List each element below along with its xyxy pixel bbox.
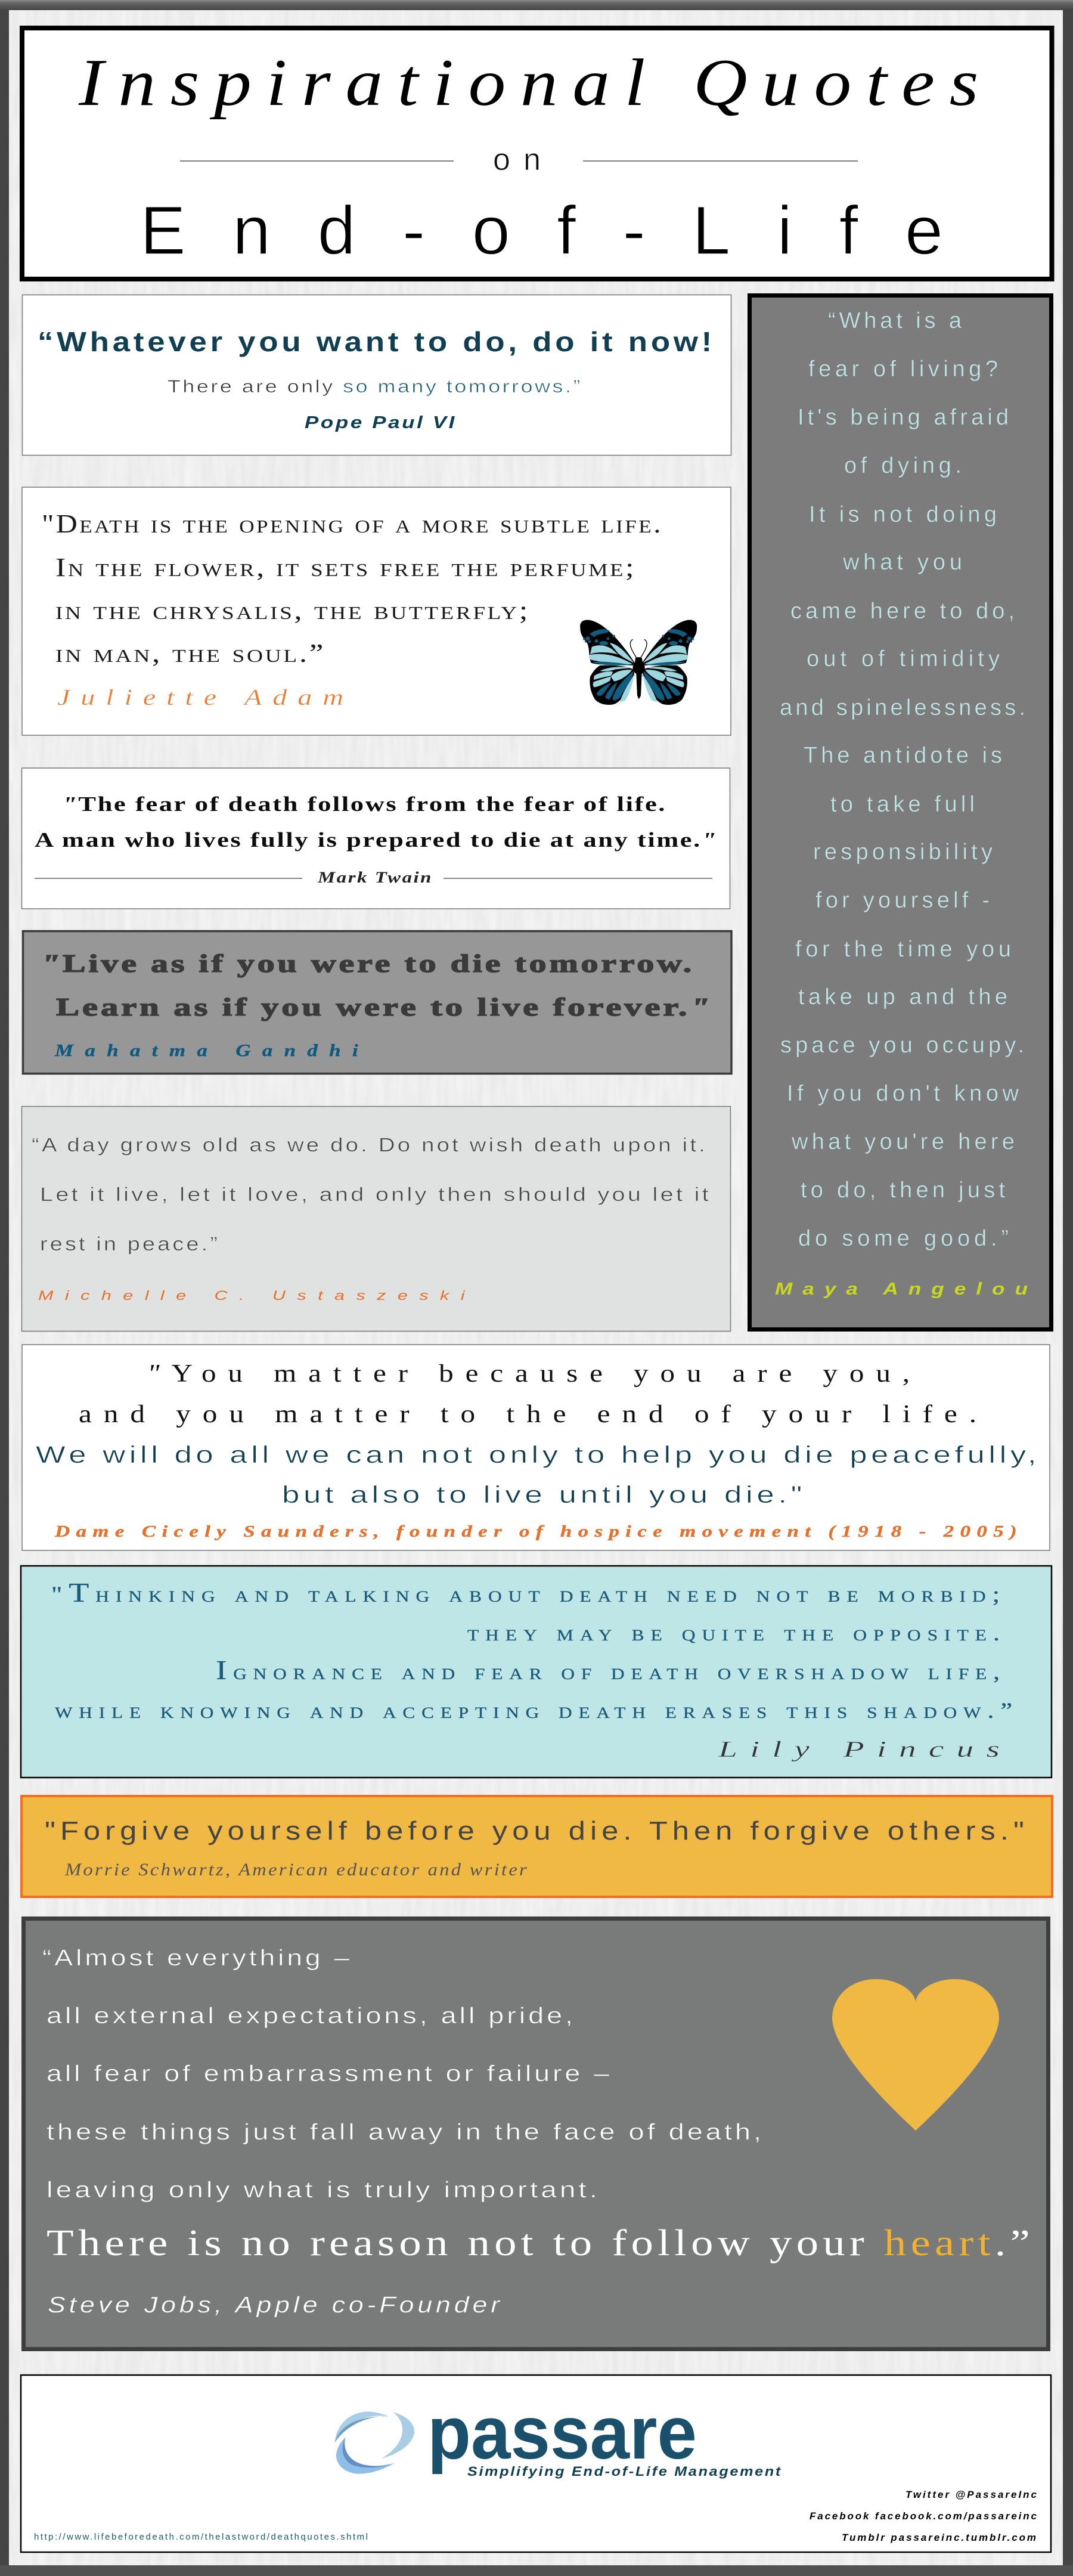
quote text: in man, the soul.” — [55, 639, 325, 668]
quote text — [42, 509, 663, 668]
quote text: Learn as if you were to live forever. " — [56, 994, 712, 1021]
divider line right — [583, 160, 858, 162]
quote headline: “Whatever you want to do, do it now! — [38, 326, 715, 357]
quote text: "Thinking and talking about death need not be morbid; — [51, 1577, 1006, 1608]
icon: butterfly — [580, 620, 697, 705]
quote text: space you occupy. — [780, 1033, 1024, 1058]
quote text: fear of living? — [808, 357, 998, 382]
subtitle: on: on — [493, 143, 541, 177]
quote text — [51, 1577, 1019, 1723]
quote text teal: but also to live until you die." — [282, 1482, 806, 1508]
quote text — [780, 308, 1025, 1251]
quote text — [42, 1946, 764, 2203]
icon: heart — [832, 1979, 999, 2131]
quote text: leaving only what is truly important. — [46, 2178, 600, 2203]
quote text: came here to do, — [790, 599, 1015, 624]
quote text: what you're here — [791, 1129, 1015, 1154]
source url: http://www.lifebeforedeath.com/thelastword/deathquotes.shtml — [34, 2532, 368, 2542]
quote text black: and you matter to the end of your life. — [79, 1401, 988, 1428]
quote text black: "You matter because you are you, — [147, 1360, 922, 1388]
quote text: “Almost everything – — [42, 1946, 352, 1971]
panel: Gandhi quote — [23, 931, 731, 1073]
quote text: "The fear of death follows from the fear of life. — [62, 792, 666, 816]
quote text: in the chrysalis, the butterfly; — [55, 596, 530, 625]
quote text teal: We will do all we can not only to help you die peacefully, — [36, 1442, 1040, 1468]
quote text — [32, 1134, 711, 1255]
icon: passare swoosh — [335, 2411, 414, 2474]
quote text: they may be quite the opposite. — [467, 1621, 1006, 1646]
social links: Tumblr passareinc.tumblr.com — [842, 2532, 1036, 2543]
attribution: Steve Jobs, Apple co-Founder — [48, 2293, 503, 2318]
quote text: If you don't know — [787, 1081, 1019, 1106]
quote text: and spinelessness. — [780, 695, 1025, 720]
quote text: The antidote is — [804, 743, 1002, 768]
quote text: for the time you — [795, 937, 1011, 962]
panel: Lily Pincus quote — [21, 1566, 1052, 1778]
wordmark: passare — [427, 2392, 697, 2475]
panel: Michelle C. Ustaszeski quote — [21, 1107, 731, 1331]
quote text: while knowing and accepting death erases this shadow.” — [55, 1699, 1019, 1723]
quote text: take up and the — [798, 984, 1007, 1010]
attribution: Lily Pincus — [717, 1737, 1012, 1762]
quote second line: There are only so many tomorrows.” — [168, 377, 582, 397]
title line: End-of-Life: End-of-Life — [140, 193, 943, 269]
quote text: of dying. — [844, 453, 962, 478]
panel: Maya Angelou quote — [750, 296, 1052, 1330]
quote text: all external expectations, all pride, — [46, 2004, 576, 2029]
quote text: to take full — [830, 792, 975, 817]
quote text: "Death is the opening of a more subtle life. — [42, 509, 663, 538]
attribution: Pope Paul VI — [305, 413, 457, 432]
quote text: Ignorance and fear of death overshadow life, — [216, 1655, 1006, 1685]
panel: Steve Jobs quote — [24, 1919, 1048, 2349]
quote text: what you — [842, 550, 962, 575]
attribution: Juliette Adam — [57, 685, 354, 710]
quote text teal — [36, 1442, 1040, 1508]
quote text: It is not doing — [809, 502, 997, 527]
tagline: Simplifying End-of-Life Management — [467, 2464, 782, 2479]
attribution: Maya Angelou — [775, 1280, 1038, 1299]
quote text: rest in peace.” — [40, 1233, 220, 1255]
attribution: Mark Twain — [317, 869, 433, 886]
panel: Cicely Saunders quote — [22, 1345, 1050, 1550]
logo — [335, 2392, 782, 2479]
social links: Twitter @PassareInc — [905, 2489, 1037, 2500]
attribution: Mahatma Gandhi — [54, 1041, 370, 1060]
quote text: “A day grows old as we do. Do not wish death upon it. — [32, 1134, 708, 1156]
title line: Inspirational Quotes: Inspirational Quotes — [78, 46, 993, 120]
quote text: It's being afraid — [798, 405, 1009, 430]
attribution: Morrie Schwartz, American educator and writer — [64, 1860, 529, 1880]
panel: Juliette Adam quote — [22, 487, 731, 735]
quote closing line: There is no reason not to follow your heart .” — [46, 2223, 1034, 2264]
rule right — [444, 878, 712, 879]
panel: footer — [21, 2375, 1051, 2552]
attribution: Michelle C. Ustaszeski — [38, 1288, 476, 1303]
panel: Morrie Schwartz quote — [21, 1796, 1052, 1897]
quote text: to do, then just — [801, 1178, 1005, 1203]
quote text: for yourself - — [815, 888, 990, 913]
quote text — [35, 792, 718, 852]
social links: Facebook facebook.com/passareinc — [810, 2510, 1037, 2522]
attribution: Dame Cicely Saunders, founder of hospice movement (1918 - 2005) — [54, 1522, 1023, 1540]
quote text: In the flower, it sets free the perfume; — [55, 553, 636, 582]
quote text: Let it live, let it love, and only then should you let it — [40, 1184, 711, 1205]
social links — [810, 2489, 1037, 2543]
quote text — [41, 950, 712, 1021]
quote text: do some good.” — [798, 1226, 1009, 1251]
quote text: responsibility — [813, 840, 993, 865]
quote text: A man who lives fully is prepared to die at any time. " — [35, 828, 718, 852]
divider line left — [180, 160, 454, 162]
quote text: "Live as if you were to die tomorrow. — [41, 950, 694, 978]
quote text: “What is a — [828, 308, 962, 333]
quote text black — [79, 1360, 988, 1428]
rule left — [35, 878, 302, 879]
quote text: these things just fall away in the face of death, — [46, 2120, 764, 2145]
panel: Pope Paul VI quote — [23, 295, 731, 456]
quote text: out of timidity — [807, 646, 1000, 671]
panel: title — [22, 28, 1052, 279]
panel: Mark Twain quote — [21, 768, 730, 909]
quote text: all fear of embarrassment or failure – — [46, 2061, 612, 2086]
quote text: "Forgive yourself before you die. Then forgive others." — [45, 1816, 1029, 1846]
